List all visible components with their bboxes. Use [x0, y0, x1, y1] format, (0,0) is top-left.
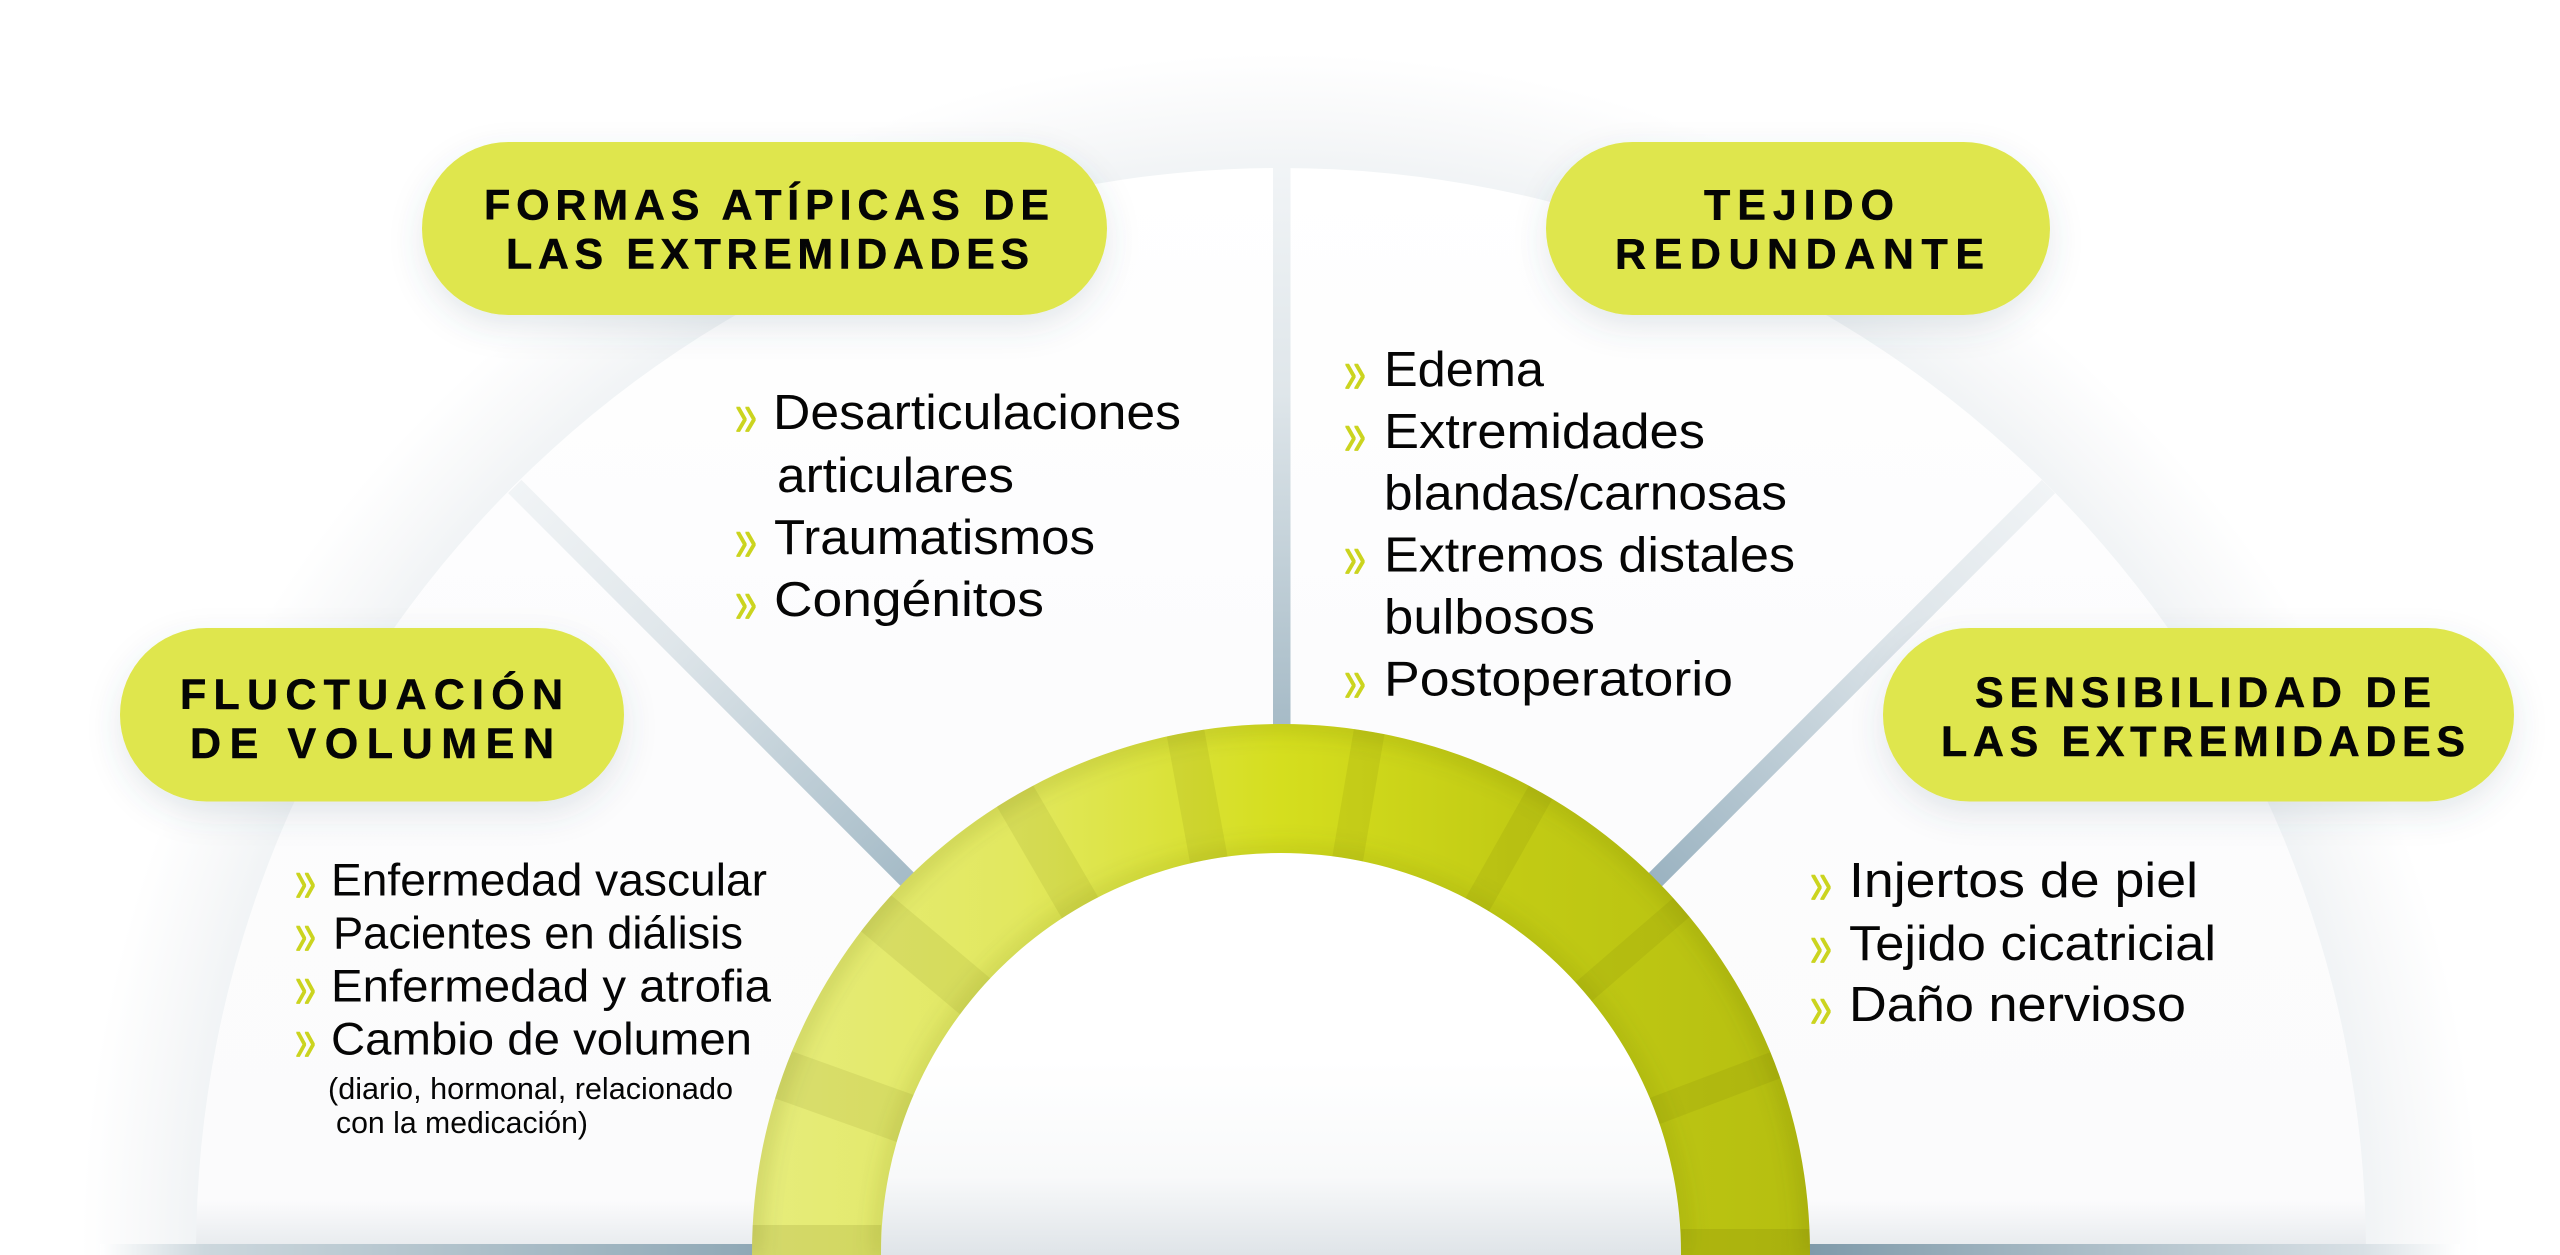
bullet list: Extremidades: [1384, 405, 1705, 459]
baseline bar: right: [1805, 1244, 2460, 1255]
heading pill: LAS EXTREMIDADES: [506, 230, 1029, 278]
bullet list: »: [295, 953, 316, 1022]
bullet list: »: [295, 1006, 316, 1075]
divider: right diagonal: [1643, 486, 2048, 892]
bullet list: »: [1344, 338, 1366, 407]
central arc ring: [752, 718, 1810, 1255]
heading pill: FORMAS ATÍPICAS DE: [484, 182, 1049, 230]
bullet list: Injertos de piel: [1849, 854, 2198, 908]
panel: formas atípicas de las extremidades: [422, 142, 1181, 637]
bullet list: »: [1810, 973, 1832, 1042]
bullet list: »: [1344, 647, 1366, 716]
bullet list: [1810, 849, 2216, 1042]
heading pill: [120, 628, 624, 802]
inner circle: [880, 852, 1682, 1255]
bullet list: (diario, hormonal, relacionado: [328, 1071, 733, 1106]
bullet list: »: [735, 506, 757, 575]
bullet list: »: [1344, 523, 1366, 592]
bullet list: Cambio de volumen: [331, 1014, 752, 1064]
bullet list: blandas/carnosas: [1384, 466, 1787, 520]
bullet list: »: [295, 900, 316, 969]
bullet list: con la medicación): [336, 1105, 588, 1140]
bullet list: »: [1344, 400, 1366, 469]
semicircle sector panel: [196, 168, 2366, 1255]
baseline bar: left: [100, 1244, 760, 1255]
bullet list: Daño nervioso: [1849, 978, 2186, 1032]
bullet list: Extremos distales: [1384, 528, 1795, 582]
heading pill: [1546, 142, 2050, 315]
heading pill: LAS EXTREMIDADES: [1941, 718, 2465, 766]
heading pill: TEJIDO: [1704, 182, 1894, 230]
bullet list: Postoperatorio: [1384, 652, 1733, 706]
divider: vertical: [1273, 168, 1290, 738]
heading pill: [422, 142, 1107, 315]
panel: sensibilidad de las extremidades: [1810, 628, 2514, 1042]
bullet list: »: [735, 381, 757, 450]
panel: tejido redundante: [1344, 142, 2050, 716]
bullet list: Enfermedad y atrofia: [331, 960, 772, 1012]
heading pill: REDUNDANTE: [1615, 230, 1984, 278]
bullet list: »: [735, 568, 757, 637]
panel: fluctuación de volumen: [120, 628, 772, 1140]
heading pill: SENSIBILIDAD DE: [1975, 669, 2431, 717]
bullet list: Pacientes en diálisis: [333, 908, 743, 958]
heading pill: FLUCTUACIÓN: [180, 670, 563, 719]
bullet list: Tejido cicatricial: [1849, 917, 2216, 971]
bullet list: Edema: [1384, 343, 1545, 397]
bullet list: articulares: [777, 449, 1014, 503]
bullet list: Enfermedad vascular: [331, 854, 767, 906]
bullet list: Traumatismos: [774, 511, 1095, 565]
heading pill: [1883, 628, 2514, 802]
bullet list: [1344, 338, 1795, 716]
bullet list: [295, 847, 772, 1140]
bullet list: »: [1810, 912, 1832, 981]
bullet list: bulbosos: [1384, 590, 1595, 644]
divider: left diagonal: [515, 486, 920, 892]
bullet list: Congénitos: [774, 573, 1044, 627]
heading pill: DE VOLUMEN: [190, 720, 554, 768]
bullet list: Desarticulaciones: [773, 386, 1181, 440]
bullet list: »: [1810, 849, 1832, 918]
bullet list: »: [295, 847, 316, 916]
bullet list: [735, 381, 1181, 637]
